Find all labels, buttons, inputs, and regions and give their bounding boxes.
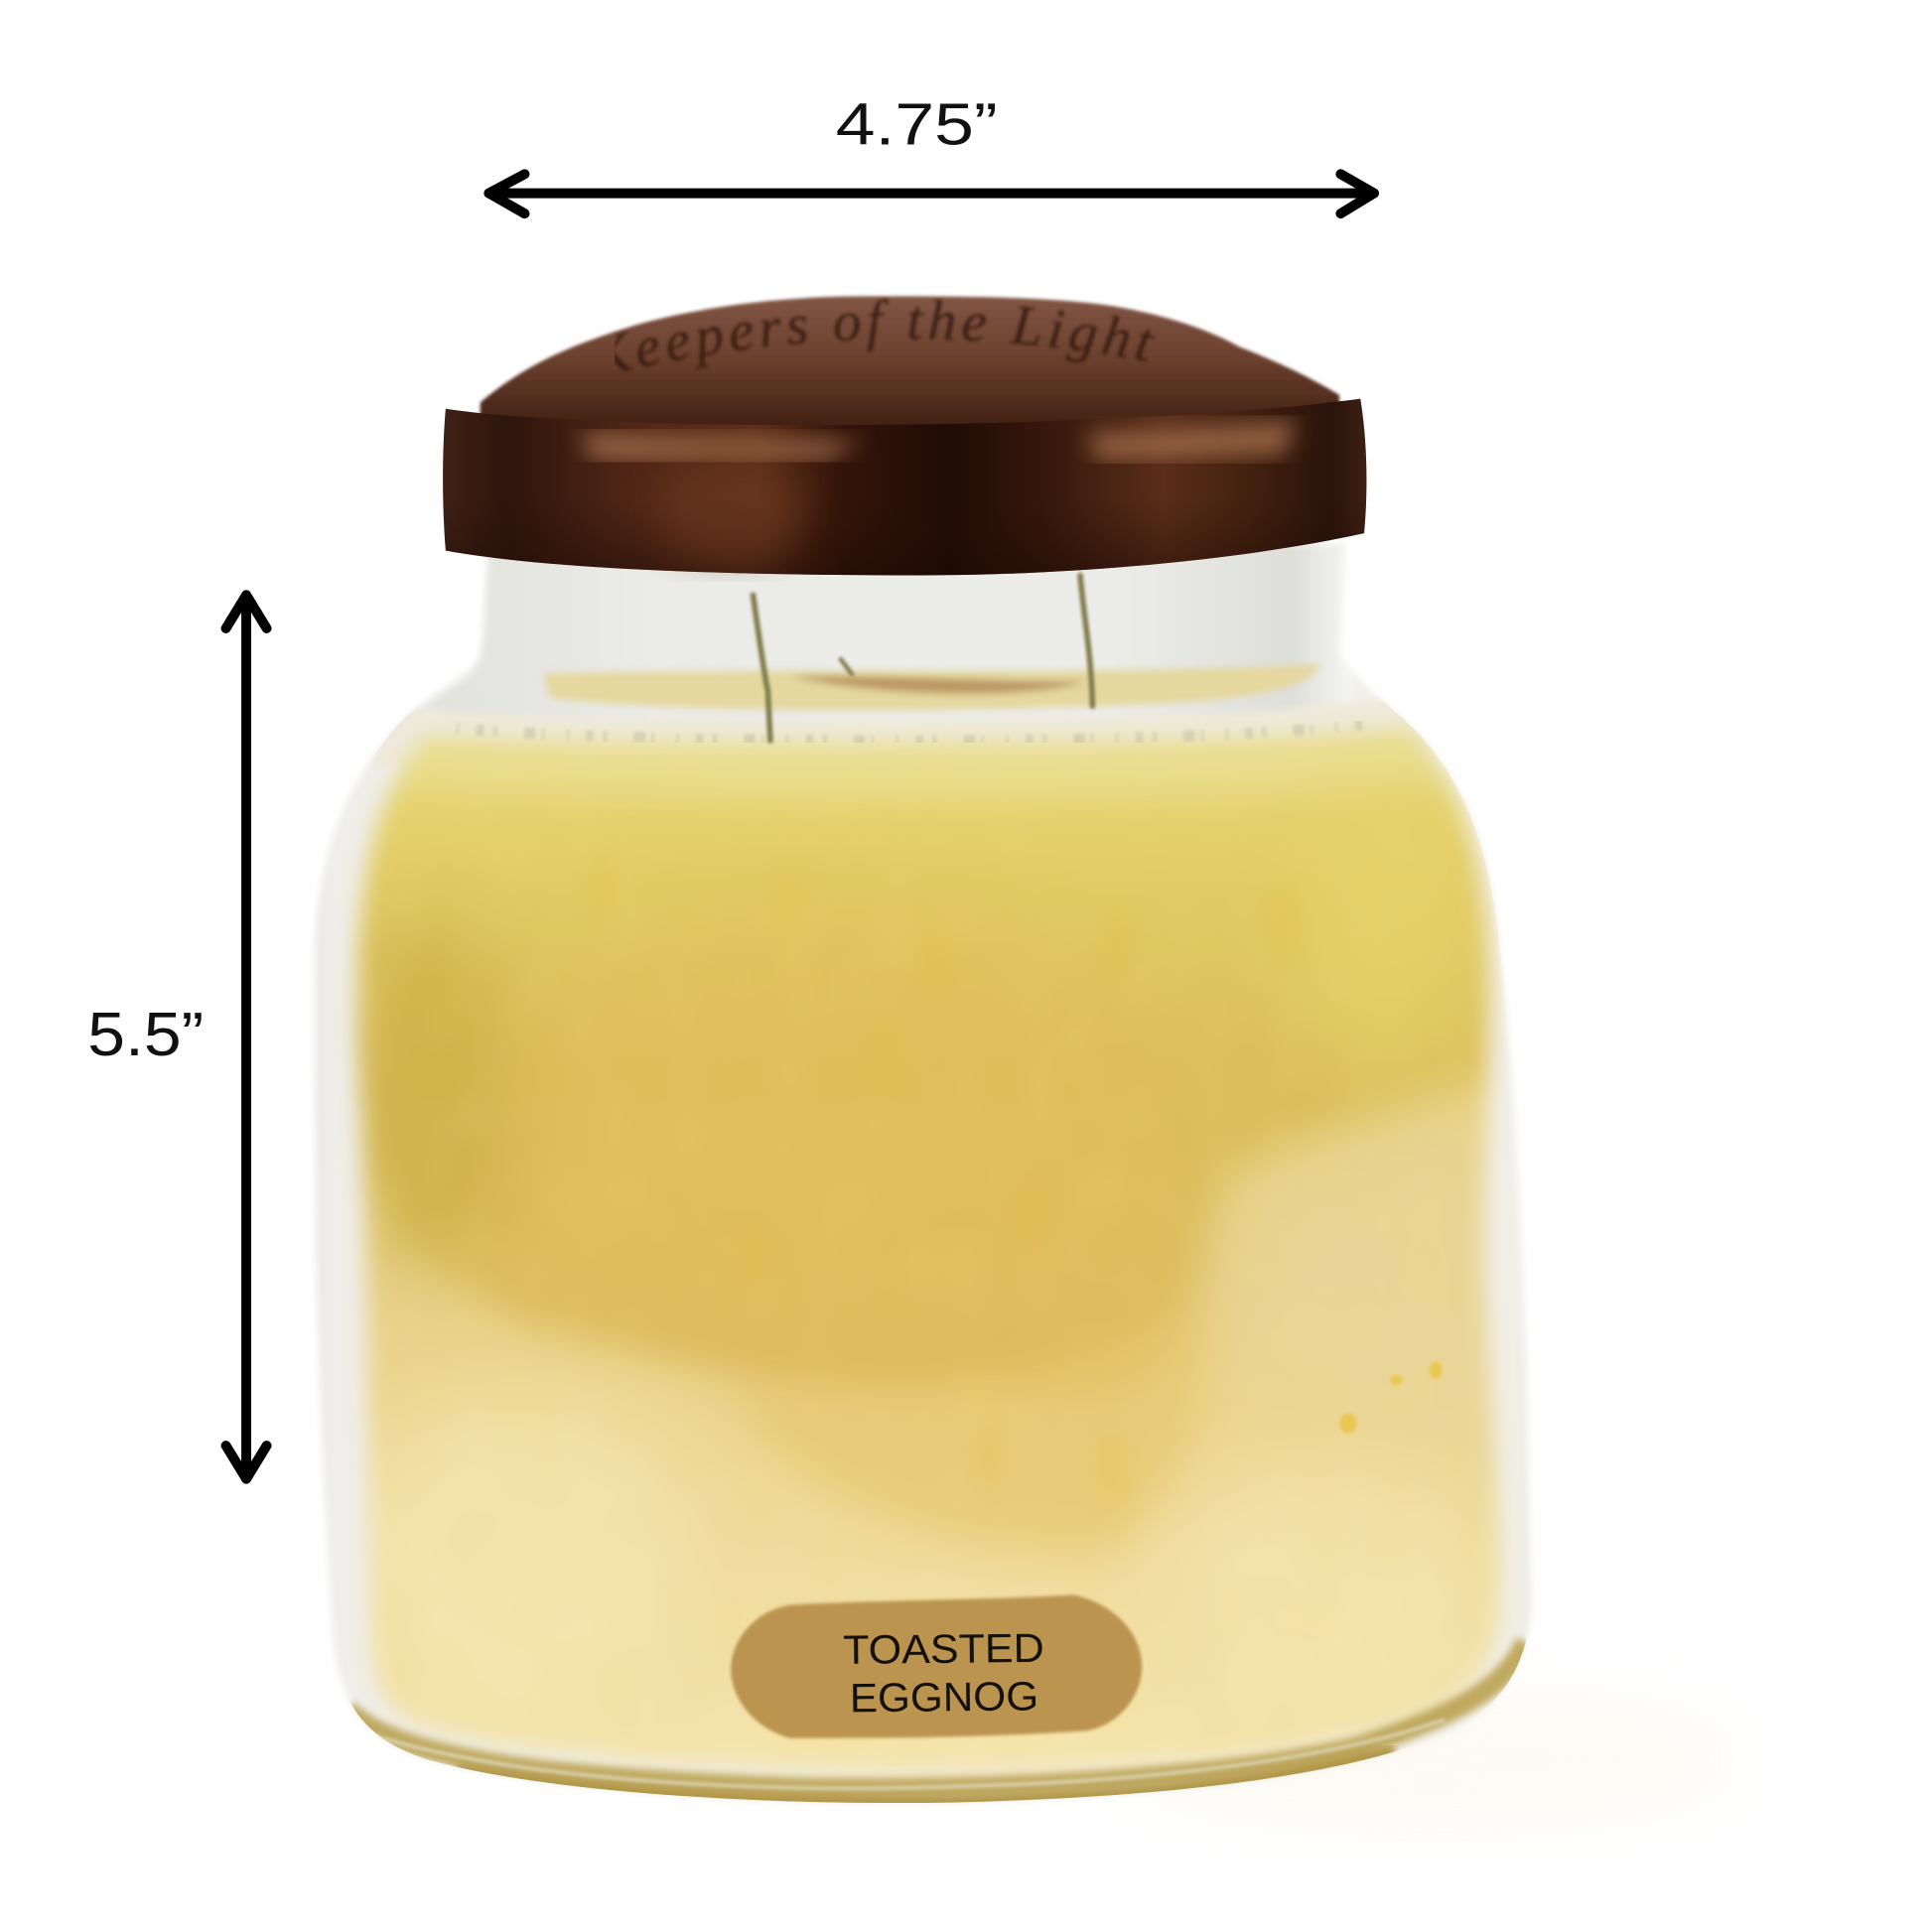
rim warm glow	[654, 463, 802, 562]
label text: EGGNOG	[850, 1673, 1038, 1721]
arrow: height dimension	[226, 595, 267, 1479]
engraved lid lettering: Keepers of the Light	[615, 297, 1156, 372]
frosted shoulder band	[370, 698, 1432, 765]
label text: TOASTED	[843, 1625, 1044, 1673]
lid rim	[443, 399, 1366, 575]
right cream	[1207, 1099, 1482, 1382]
infographic: candle jar with dimensions	[90, 103, 1688, 1812]
rim highlight	[580, 432, 864, 460]
warm centre	[518, 901, 1161, 1320]
candle jar	[313, 294, 1688, 1812]
yellow upper pour	[345, 729, 1512, 1402]
frosty specks at wax line	[457, 724, 1370, 741]
lower cream left	[373, 1386, 678, 1654]
jar base glass	[346, 1642, 1526, 1788]
wax top surface	[543, 664, 1320, 710]
width dimension label: 4.75”	[836, 90, 998, 157]
arrow: width dimension	[488, 174, 1374, 213]
pale top band	[370, 731, 1481, 795]
bright right highlight	[1346, 959, 1424, 1047]
lower warm streak	[737, 1332, 1211, 1569]
mottled texture	[345, 729, 1518, 1790]
yellow specks	[1339, 1362, 1442, 1434]
mottled streaks	[975, 1435, 1129, 1500]
copper lid	[443, 294, 1366, 582]
label text	[843, 1625, 1045, 1721]
olive left shade	[345, 913, 506, 1259]
height dimension label: 5.5”	[87, 1001, 204, 1069]
scent label	[731, 1595, 1142, 1738]
wicks	[754, 575, 1092, 741]
lid dome	[481, 296, 1339, 432]
lower cream right	[1209, 1473, 1449, 1620]
rim bottom shade	[443, 399, 1366, 575]
rim highlight right	[1086, 420, 1297, 460]
label sticker	[731, 1595, 1142, 1738]
soft surface shadow	[1124, 1698, 1740, 1821]
wax body	[334, 716, 1531, 1790]
glass jar body	[296, 531, 1556, 1827]
jar contents	[334, 664, 1531, 1802]
